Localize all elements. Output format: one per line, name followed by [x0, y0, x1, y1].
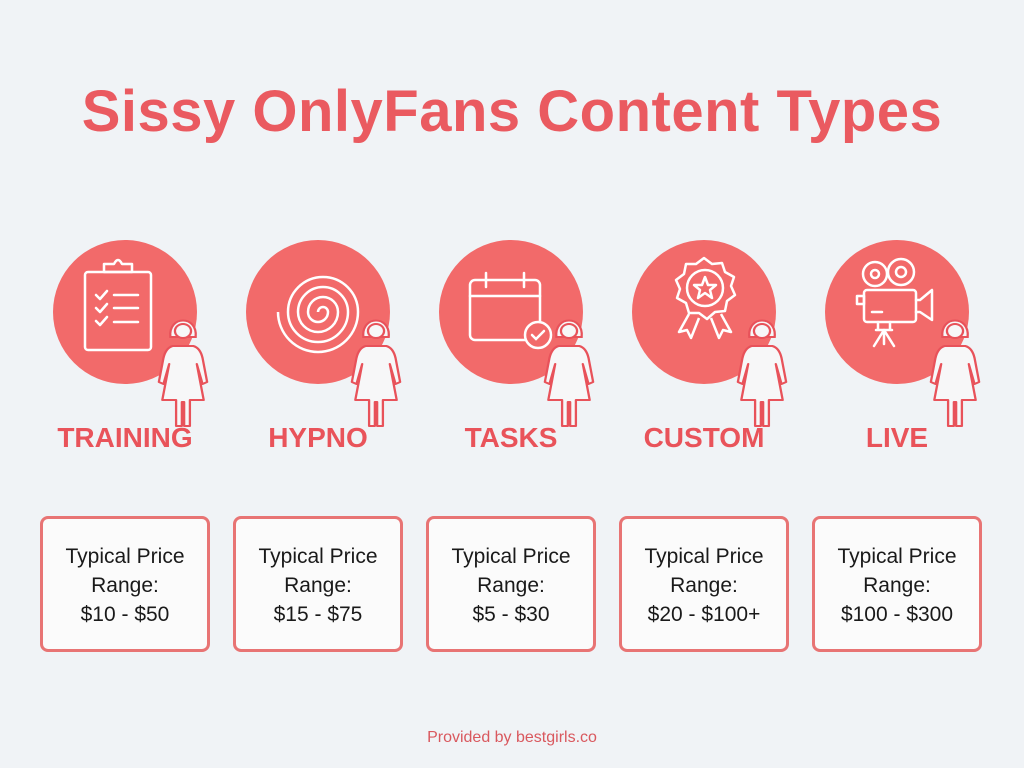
price box: $5 - $30: [472, 603, 550, 626]
column: training: [40, 240, 210, 652]
price box: $10 - $50: [81, 603, 169, 626]
price box: Range:: [670, 574, 738, 597]
label: LIVE: [866, 422, 928, 453]
price box: Range:: [284, 574, 352, 597]
price box: Typical Price: [65, 545, 185, 568]
price box: [40, 516, 210, 652]
footer credit: Provided by bestgirls.co: [427, 729, 597, 746]
price box: Typical Price: [451, 545, 571, 568]
icon: calendar: [439, 240, 594, 427]
label: HYPNO: [268, 422, 368, 453]
icon: movie camera: [825, 240, 980, 427]
title: Sissy OnlyFans Content Types: [82, 79, 942, 144]
price box: Typical Price: [258, 545, 378, 568]
price box: $20 - $100+: [648, 603, 760, 626]
price box: $100 - $300: [841, 603, 953, 626]
icon: clipboard: [53, 240, 208, 427]
column: tasks: [426, 240, 596, 652]
price box: Range:: [91, 574, 159, 597]
label: CUSTOM: [644, 422, 764, 453]
column: custom: [619, 240, 789, 652]
column: live: [812, 240, 982, 652]
price box: $15 - $75: [274, 603, 362, 626]
price box: [233, 516, 403, 652]
price box: [619, 516, 789, 652]
price box: Typical Price: [837, 545, 957, 568]
price box: Range:: [863, 574, 931, 597]
label: TRAINING: [57, 422, 193, 453]
price box: Typical Price: [644, 545, 764, 568]
icon: spiral: [246, 240, 402, 427]
icon: award badge: [632, 240, 788, 427]
price box: Range:: [477, 574, 545, 597]
price box: [426, 516, 596, 652]
label: TASKS: [465, 422, 557, 453]
price box: [812, 516, 982, 652]
column: hypno: [233, 240, 403, 652]
